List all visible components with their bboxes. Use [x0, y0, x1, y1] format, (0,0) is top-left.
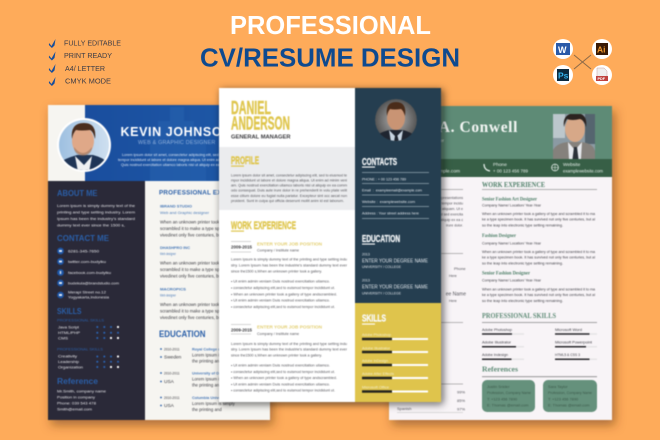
contact strip: Website: [563, 162, 581, 168]
professional skills section: Microsoft Powerpoint: [555, 340, 593, 344]
skills: Creativity: [58, 354, 77, 358]
title: CV/RESUME DESIGN: [200, 42, 460, 72]
education column: Lorem Ipsum is simply: [192, 352, 236, 358]
green header: [378, 106, 612, 159]
left column fragments: ee Name: [446, 292, 466, 298]
education column: Lorem Ipsum is simply: [192, 401, 236, 406]
work experience section: since the1500 s,When an unknown printer took a gallery.: [231, 268, 322, 274]
references section: Profession, Company Name: [548, 390, 592, 395]
skills: HTML/PHP: [58, 330, 80, 335]
skills: SKILLS: [57, 307, 82, 316]
reference: Phone: 039 543 478: [57, 400, 97, 406]
work experience section: ke a type specimen book. It has survived not only five centuries, but al: [482, 293, 595, 297]
education: 2013: [362, 252, 370, 256]
work experience section: • consectetur adipiscing elit,sed to euismod tempor incididunt ut.: [231, 285, 335, 290]
education column: Lorem Ipsum is simply: [192, 376, 236, 382]
software icons: [553, 39, 612, 85]
contacts: Website : examplewebsite.com: [362, 199, 415, 204]
education: EDUCATION: [362, 234, 400, 245]
contact me: [57, 234, 120, 300]
education column: the printing and: [192, 358, 222, 364]
reference: Smith@email.com: [57, 406, 93, 412]
education column: the printing and: [192, 407, 222, 412]
professional experience column: vivedinet only five centuries, but also: [160, 274, 232, 278]
contacts: Email : exampleemail@example.com: [362, 188, 422, 192]
name block: ANDERSON: [231, 114, 290, 134]
about me: printing and type setting industry. Lorem: [57, 210, 136, 214]
references section: References: [482, 364, 518, 374]
reference: Reference: [57, 377, 99, 386]
professional experience column: When an unknown printer took a gallery: [160, 302, 238, 307]
profile section: esse cillum dolore eu fugiat nulla pariatur. Excepteur sint occ aecat non: [231, 193, 347, 198]
skills panel: Adobe Photoshop: [362, 333, 391, 337]
education column: Columbia University: [192, 396, 230, 400]
references section: Profession, Company Name: [487, 390, 531, 395]
about me: ABOUT ME: [57, 189, 98, 198]
work experience section: so the leap into electronic type setting remaining.: [482, 262, 563, 266]
professional skills section: PROFESSIONAL SKILLS: [482, 311, 556, 320]
skills panel: Adobe InDesign: [362, 359, 388, 363]
left column fragments: Phone: [454, 266, 466, 271]
professional skills section: HTML5 & CSS 3: [555, 352, 580, 357]
education column: 2010-2011: [164, 372, 180, 376]
portrait: Daniel: [375, 99, 417, 142]
title: [200, 10, 460, 72]
resume card: Kevin Johnson (left): [48, 105, 270, 420]
work experience section: since the1500 s,When an unknown printer took a gallery.: [231, 352, 322, 358]
dark sidebar: [48, 181, 145, 420]
professional experience column: scrambled it to make a type specimen: [160, 267, 234, 272]
green header: Thomas A. Conwell: [378, 119, 518, 136]
reference: Position in company: [57, 394, 95, 400]
reference: [57, 377, 107, 412]
work experience section: Lorem Ipsum is simply dummy text of the printing and type setting indu: [231, 341, 347, 346]
education: [362, 234, 429, 296]
contact strip: + 00 123 456 789: [493, 168, 528, 174]
portrait: Conwell: [553, 113, 595, 160]
contacts: CONTACTS: [362, 157, 397, 168]
left column fragments: sed sed exercita: [437, 212, 463, 216]
software icons: Ai: [597, 44, 606, 54]
education column: the printing and: [192, 382, 222, 388]
work experience section: so the leap into electronic type setting remaining.: [482, 224, 563, 228]
work experience section: WORK EXPERIENCE: [231, 220, 296, 232]
professional experience column: vivedinet only five centuries, but also: [160, 232, 232, 238]
blue header: [84, 104, 220, 182]
references section: Justin Snider: [487, 384, 510, 389]
work experience section: • When an unknown printer took a gallery of type andscrambled.: [231, 292, 337, 296]
feature checklist: FULLY EDITABLE: [64, 38, 121, 48]
contact strip: Phone: [493, 162, 507, 168]
references section: T: +123 456 7890: [548, 396, 579, 402]
left column fragments: Here: [449, 274, 457, 278]
blue header: KEVIN JOHNSON: [120, 125, 232, 139]
work experience section: Company / Institute name: [257, 248, 299, 252]
work experience section: Senior Fashion Art Designer: [482, 198, 538, 202]
contact me: 6281-345-7650: [68, 248, 100, 254]
profile section: proident. Sunt in culpa qui officia deserunt mollit anim id est laborum.: [231, 198, 344, 203]
software icons: PDF: [598, 77, 606, 81]
education: UNIVERSITY / COLLEGE: [362, 292, 402, 296]
left column fragments: 85%: [457, 398, 465, 403]
contact me: facebook.com-budylku: [68, 270, 111, 275]
about me: dummy text ever since the 1500 s,: [57, 222, 125, 228]
professional experience column: [158, 189, 220, 320]
portrait: Kevin: [57, 118, 111, 172]
profile section: odo consequat. Duis aute irure dolor in re prehenderit in volu ptate velit: [231, 188, 348, 193]
contact me: Yogyakarta,Indonesia: [68, 294, 110, 300]
education: ENTER YOUR DEGREE NAME: [362, 258, 429, 264]
professional skills section: Adobe Illustrator: [482, 340, 512, 344]
name block: [231, 98, 291, 141]
education: UNIVERSITY / COLLEGE: [362, 265, 402, 269]
resume card: Thomas A. Conwell (right): [378, 106, 612, 420]
feature checklist: A4/ LETTER: [65, 64, 105, 73]
professional experience column: DHASHPRO INC: [160, 246, 190, 250]
professional skills section: Microsoft Word: [555, 327, 582, 332]
left column fragments: irure dolor.: [446, 224, 463, 228]
resume card: Daniel Anderson (center): [219, 88, 441, 402]
skills panel: Adobe Illustrator: [362, 346, 391, 350]
contacts: PHONE : + 00 123 456 789: [362, 176, 406, 182]
feature checklist: CMYK MODE: [65, 76, 111, 86]
contact strip: mple.com: [439, 168, 460, 174]
education column: 2010-2011: [164, 396, 180, 400]
professional experience column: Web and Graphic designer: [160, 211, 210, 215]
skills: PROFESSIONAL SKILLS: [57, 318, 104, 322]
name block: DANIEL: [231, 98, 271, 118]
skills: Leadership: [58, 359, 80, 364]
left column fragments: tempor incidu: [441, 202, 463, 206]
work experience section: stry. Lorem Ipsum has been the industrie's standard dummy text ever: [231, 262, 348, 268]
left column fragments: Ut aliquam. Ut e: [437, 207, 463, 211]
work experience section: When an unknown printer took a gallery of type and scrambled it to ma: [482, 212, 596, 216]
left column fragments: representations: [438, 196, 463, 200]
professional skills section: [482, 311, 597, 359]
work experience section: 2009-2015: [231, 244, 252, 250]
left column fragments: Spanish: [397, 406, 411, 411]
reference: Mr.Smith, company name: [57, 388, 107, 394]
work experience section: • consectetur adipiscing elit,sed to euismod tempor incididunt ut.: [231, 369, 335, 374]
work experience section: ke a type specimen book. It has survived not only five centuries, but al: [482, 218, 595, 222]
work experience section: ke a type specimen book. It has survived not only five centuries, but al: [482, 256, 595, 260]
references section: T: +123 456 7890: [487, 396, 518, 402]
skills panel: [355, 303, 441, 402]
work experience section: so the leap into electronic type setting remaining.: [482, 299, 563, 303]
profile section: Lorem ipsum dolor sit amet, consectetur adipiscing elit, sed to eiusmod te: [231, 172, 347, 178]
blue header: Quis nostrud exercitation ullamco laboris nisi ut aliquip ex ea commodo: [121, 163, 237, 167]
professional experience column: scrambled it to make a type specimen: [160, 226, 234, 231]
skills: [57, 307, 119, 370]
work experience section: • Ut enim admin veniam Duis nostrud exercitation ullamco.: [231, 278, 330, 284]
professional experience column: Web designer: [160, 294, 177, 298]
work experience section: • consectetur adipiscing elit,sed to euismod tempor incididunt ut.: [231, 388, 335, 392]
work experience section: [482, 180, 597, 303]
education column: USA: [164, 403, 175, 409]
professional experience column: When an unknown printer took a gallery: [160, 260, 238, 266]
profile section: am. Quis nostrud exercitation ullamco laboris nisi ut aliquip ex ea comm: [231, 182, 347, 188]
work experience section: [231, 220, 348, 392]
about me: [57, 189, 136, 228]
skills: CMS: [58, 336, 68, 340]
work experience section: WORK EXPERIENCE: [482, 180, 545, 189]
professional experience column: scrambled it to make a type specimen: [160, 308, 234, 314]
professional experience column: PROFESSIONAL EXPERIENCE: [159, 190, 256, 196]
left column fragments: [397, 190, 466, 412]
contact strip: [389, 159, 612, 177]
work experience section: • When an unknown printer took a gallery of type andscrambled.: [231, 375, 337, 380]
professional experience column: When an unknown printer took a gallery: [160, 220, 238, 224]
work experience section: Lorem Ipsum is simply dummy text of the printing and type setting indu: [231, 256, 347, 262]
references section: E: Thomas @email.com: [487, 402, 528, 408]
work experience section: When an unknown printer took a gallery of type and scrambled it to ma: [482, 288, 596, 292]
work experience section: ENTER YOUR JOB POSITION: [257, 324, 323, 330]
name block: GENERAL MANAGER: [231, 135, 291, 141]
work experience section: • consectetur adipiscing elit,sed to euismod tempor incididunt ut.: [231, 304, 335, 309]
education: ENTER YOUR DEGREE NAME: [362, 284, 429, 290]
software icons: W: [558, 45, 567, 55]
contact me: twitter.com-budylku: [68, 259, 106, 264]
work experience section: 2009-2015: [231, 328, 252, 334]
contacts: [362, 157, 429, 218]
profile section: mpor incididunt ut labore et dolore magna aliqua. Ut enim ad minim veni: [231, 178, 347, 182]
title: PROFESSIONAL: [230, 10, 431, 40]
contact me: budekula@brandstudio.com: [68, 280, 120, 286]
left column fragments: 97%: [457, 406, 465, 412]
skills: PROFESSIONAL SKILLS: [57, 346, 103, 352]
work experience section: When an unknown printer took a gallery of type and scrambled it to ma: [482, 250, 596, 254]
software icons: Ps: [558, 70, 569, 80]
contact me: Merapi Street no.12: [68, 290, 107, 294]
work experience section: Fashion Designer: [482, 234, 517, 239]
work experience section: Company Name/ Location/ Year-Year: [482, 204, 542, 208]
feature checklist: [49, 38, 121, 86]
skills panel: Microsoft Office: [362, 386, 389, 390]
feature checklist: PRINT READY: [64, 51, 112, 60]
blue header: tempor incididunt ut labore et dolore magna aliqua. Ut enim ad minim: [118, 158, 231, 162]
contacts: Address : Your street address here: [362, 210, 419, 216]
left column fragments: 99%: [457, 390, 465, 394]
skills panel: Adobe After Effects: [362, 372, 394, 376]
about me: Ipsum has been the industry's standard: [57, 216, 135, 221]
work experience section: • Ut enim admin veniam Duis nostrud exercitation ullamco.: [231, 298, 330, 303]
references section: [482, 364, 597, 412]
professional experience column: IBRAND STUDIO: [160, 204, 192, 208]
work experience section: ENTER YOUR JOB POSITION: [257, 242, 323, 248]
skills panel: SKILLS: [362, 314, 386, 324]
blue header: WEB & GRAPHIC DESIGNER: [138, 140, 215, 146]
contact me: CONTACT ME: [57, 234, 109, 243]
references section: Sara Taylor: [548, 384, 568, 389]
skills: Java Script: [58, 324, 80, 330]
education column: University of Oxford: [192, 372, 229, 376]
education: 2013: [362, 278, 370, 282]
professional skills section: Adobe Indesign: [482, 352, 508, 357]
work experience section: stry. Lorem Ipsum has been the industrie's standard dummy text ever: [231, 346, 348, 352]
work experience section: Company Name/ Location/ Year-Year: [482, 242, 542, 246]
education column: EDUCATION: [159, 329, 206, 339]
professional skills section: Adobe Photoshop: [482, 327, 512, 332]
navy sidebar: [355, 88, 441, 303]
profile section: [219, 147, 355, 210]
professional experience column: Web designer: [160, 252, 177, 256]
blue header: Lorem ipsum dolor sit amet, consectetur adipiscing elit, sed do eius: [122, 153, 232, 157]
education column: Royal College of Art: [192, 348, 229, 352]
references section: E: Thomas @email.com: [548, 402, 590, 408]
education column: Sweden: [164, 354, 182, 360]
green header: Fashion Designer: [409, 138, 444, 143]
profile section: PROFILE: [231, 155, 259, 167]
professional experience column: MACROPICS: [160, 288, 187, 292]
left column fragments: aliquip ex ea c: [440, 218, 463, 222]
skills: Organization: [58, 364, 83, 370]
education column: 2010-2011: [164, 348, 180, 352]
work experience section: Company / Institute name: [257, 331, 299, 336]
work experience section: Company Name/ Location/ Year-Year: [482, 278, 542, 282]
work experience section: Senior Fashion Designer: [482, 272, 531, 276]
about me: Lorem ipsum is simply dummy text of the: [57, 203, 136, 208]
education column: [159, 329, 236, 412]
professional experience column: vivedinet only five centuries, but also: [160, 315, 232, 320]
work experience section: • Ut enim admin veniam Duis nostrud exercitation ullamco.: [231, 382, 330, 386]
left column fragments: Here: [449, 299, 457, 303]
education column: USA: [164, 379, 175, 385]
contact strip: examplewebsite.com: [563, 168, 603, 174]
work experience section: • Ut enim admin veniam Duis nostrud exercitation ullamco.: [231, 362, 330, 368]
